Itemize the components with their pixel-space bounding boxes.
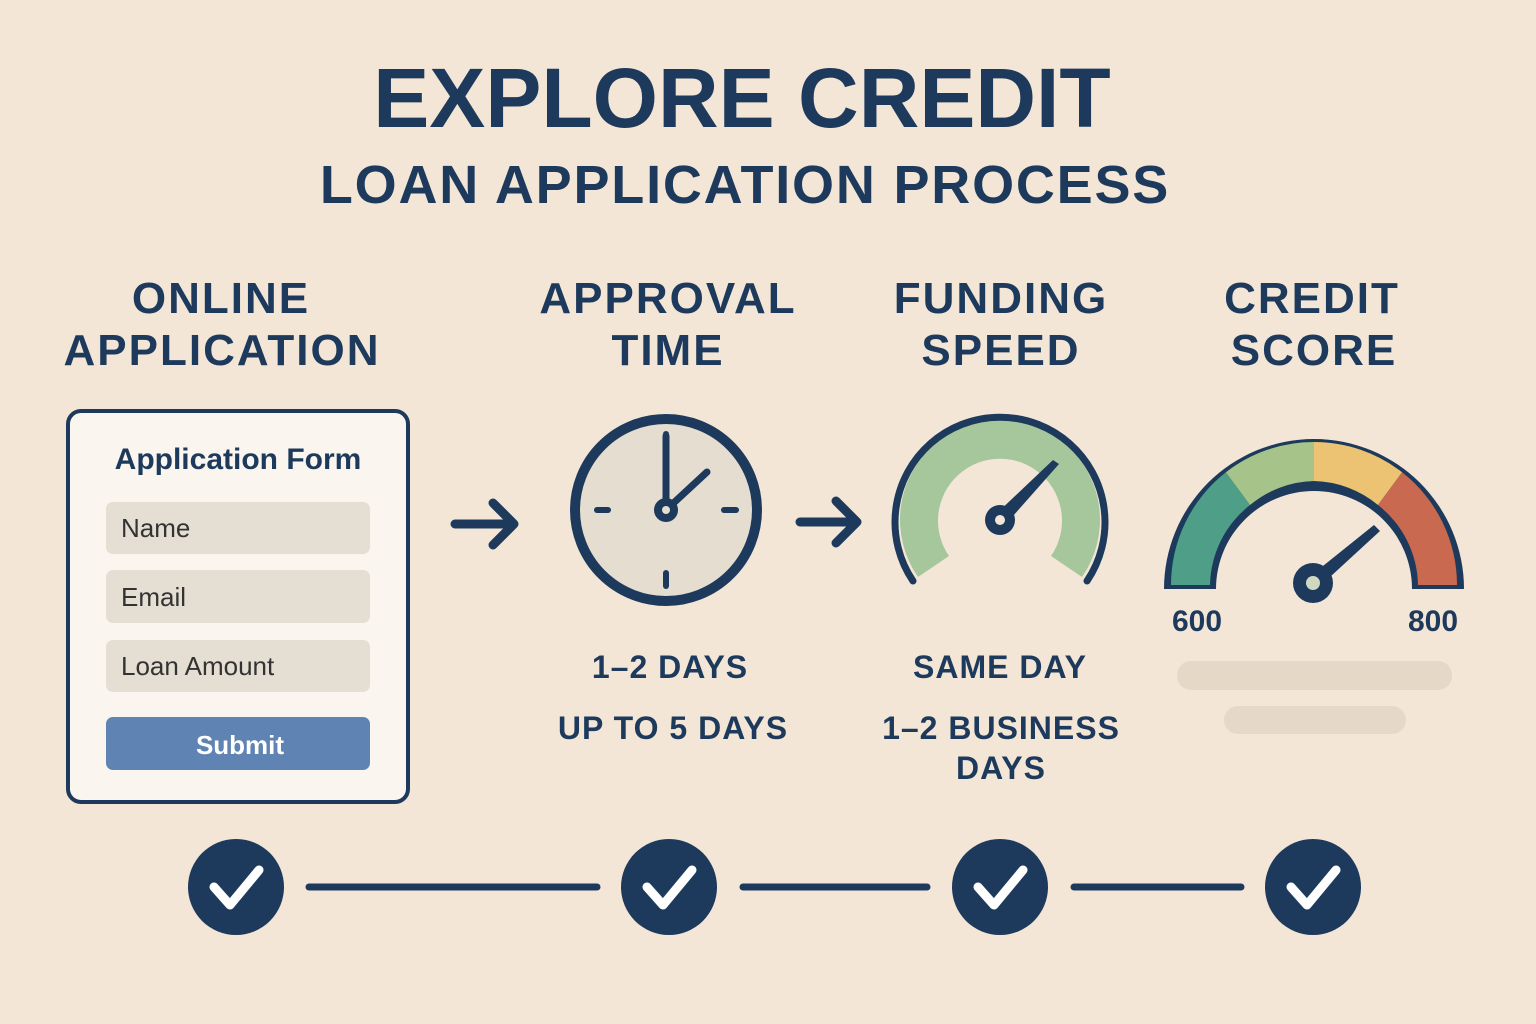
text: funding times (882, 649, 1120, 786)
heading: approval time (539, 274, 797, 375)
heading: credit score: CREDIT (1224, 274, 1400, 323)
field: email (106, 570, 370, 623)
heading: credit score (1224, 274, 1400, 375)
heading: online application: APPLICATION (64, 326, 380, 375)
progress timeline (188, 839, 1361, 935)
field: loan amount: Loan Amount (121, 651, 275, 681)
panel: application form (68, 411, 408, 802)
field: email: Email (121, 582, 186, 612)
text: approval times (558, 649, 788, 746)
form heading: Application Form (115, 443, 361, 476)
text: approval times: 1–2 DAYS (592, 649, 748, 685)
title: EXPLORE CREDIT (373, 51, 1111, 145)
label 800: 800 (1408, 605, 1458, 638)
arrow 1 (455, 503, 514, 545)
heading: funding speed: SPEED (921, 326, 1081, 375)
check 2 (621, 839, 717, 935)
heading: online application (64, 274, 380, 375)
field: name (106, 502, 370, 554)
icon: speed gauge (895, 417, 1105, 581)
field: name: Name (121, 513, 190, 543)
check 4 (1265, 839, 1361, 935)
icon: credit score gauge (1164, 439, 1464, 734)
heading: online application: ONLINE (132, 274, 310, 323)
text: approval times: UP TO 5 DAYS (558, 710, 788, 746)
heading: credit score: SCORE (1231, 326, 1397, 375)
placeholder bars (1177, 661, 1452, 734)
check 1 (188, 839, 284, 935)
submit button (106, 717, 370, 770)
arrow 2 (800, 501, 857, 543)
check 3 (952, 839, 1048, 935)
heading: approval time: APPROVAL (539, 274, 797, 323)
text: funding times: DAYS (956, 750, 1046, 786)
icon: clock (575, 419, 757, 601)
label 600: 600 (1172, 605, 1222, 638)
subtitle: LOAN APPLICATION PROCESS (320, 155, 1170, 215)
heading: funding speed (894, 274, 1108, 375)
field: loan amount (106, 640, 370, 692)
heading: approval time: TIME (611, 326, 725, 375)
text: funding times: 1–2 BUSINESS (882, 710, 1120, 746)
heading: funding speed: FUNDING (894, 274, 1108, 323)
text: funding times: SAME DAY (913, 649, 1087, 685)
submit button: Submit (196, 730, 284, 760)
